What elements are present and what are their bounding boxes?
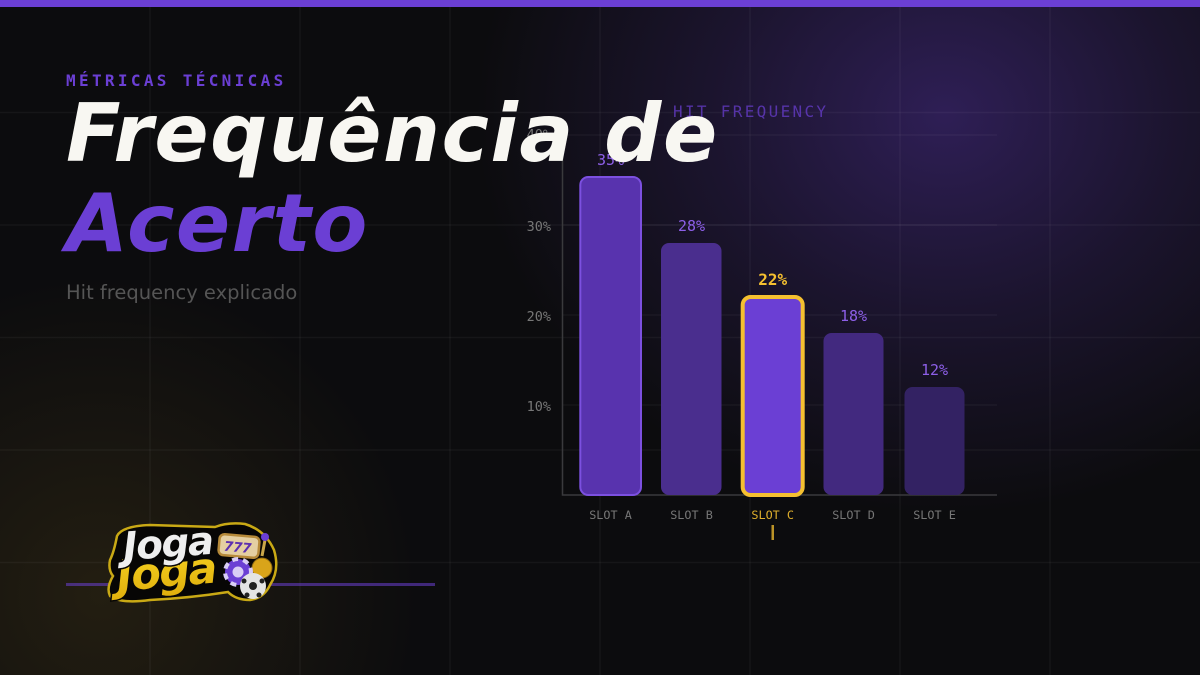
bar chart xyxy=(527,102,997,540)
bar: Slot E: 12% xyxy=(921,361,948,379)
bar: Slot E: SLOT E xyxy=(913,508,956,522)
y axis labels: 30% xyxy=(527,219,551,235)
top accent bar xyxy=(0,0,1200,7)
chart axes xyxy=(562,135,997,495)
bar: Slot D: 18% xyxy=(840,307,867,325)
subtitle: Hit frequency explicado xyxy=(66,281,297,304)
logo backing blob xyxy=(109,523,276,601)
bar: Slot B xyxy=(661,217,722,522)
y axis labels: 20% xyxy=(527,309,551,325)
chart title: HIT FREQUENCY xyxy=(673,102,828,121)
bar: Slot B: SLOT B xyxy=(670,508,713,522)
title xyxy=(60,87,719,270)
bar: Slot A: SLOT A xyxy=(589,508,632,522)
logo icons: 777 xyxy=(223,539,253,557)
logo word: bottom Joga: Joga xyxy=(107,543,218,603)
bar: Slot C highlighted xyxy=(743,270,803,540)
title: Acerto xyxy=(66,177,369,270)
eyebrow label: MÉTRICAS TÉCNICAS xyxy=(66,71,287,90)
bar: Slot D: SLOT D xyxy=(832,508,875,522)
bar: Slot A xyxy=(580,151,641,522)
y axis labels: 40% xyxy=(527,127,551,143)
title: Frequência de xyxy=(66,87,719,180)
bar: Slot C highlighted: 22% xyxy=(758,270,788,289)
logo icons xyxy=(218,533,272,599)
logo: Joga Joga xyxy=(107,519,276,603)
bar: Slot C highlighted: SLOT C xyxy=(751,508,794,522)
y axis labels: 10% xyxy=(527,399,551,415)
bar: Slot B: 28% xyxy=(678,217,705,235)
logo word: top Joga: Joga xyxy=(115,519,214,570)
bar: Slot A: 35% xyxy=(597,151,624,169)
bar: Slot E xyxy=(904,361,964,522)
y axis labels xyxy=(527,127,551,415)
divider line xyxy=(66,583,435,586)
bar: Slot D xyxy=(824,307,884,522)
